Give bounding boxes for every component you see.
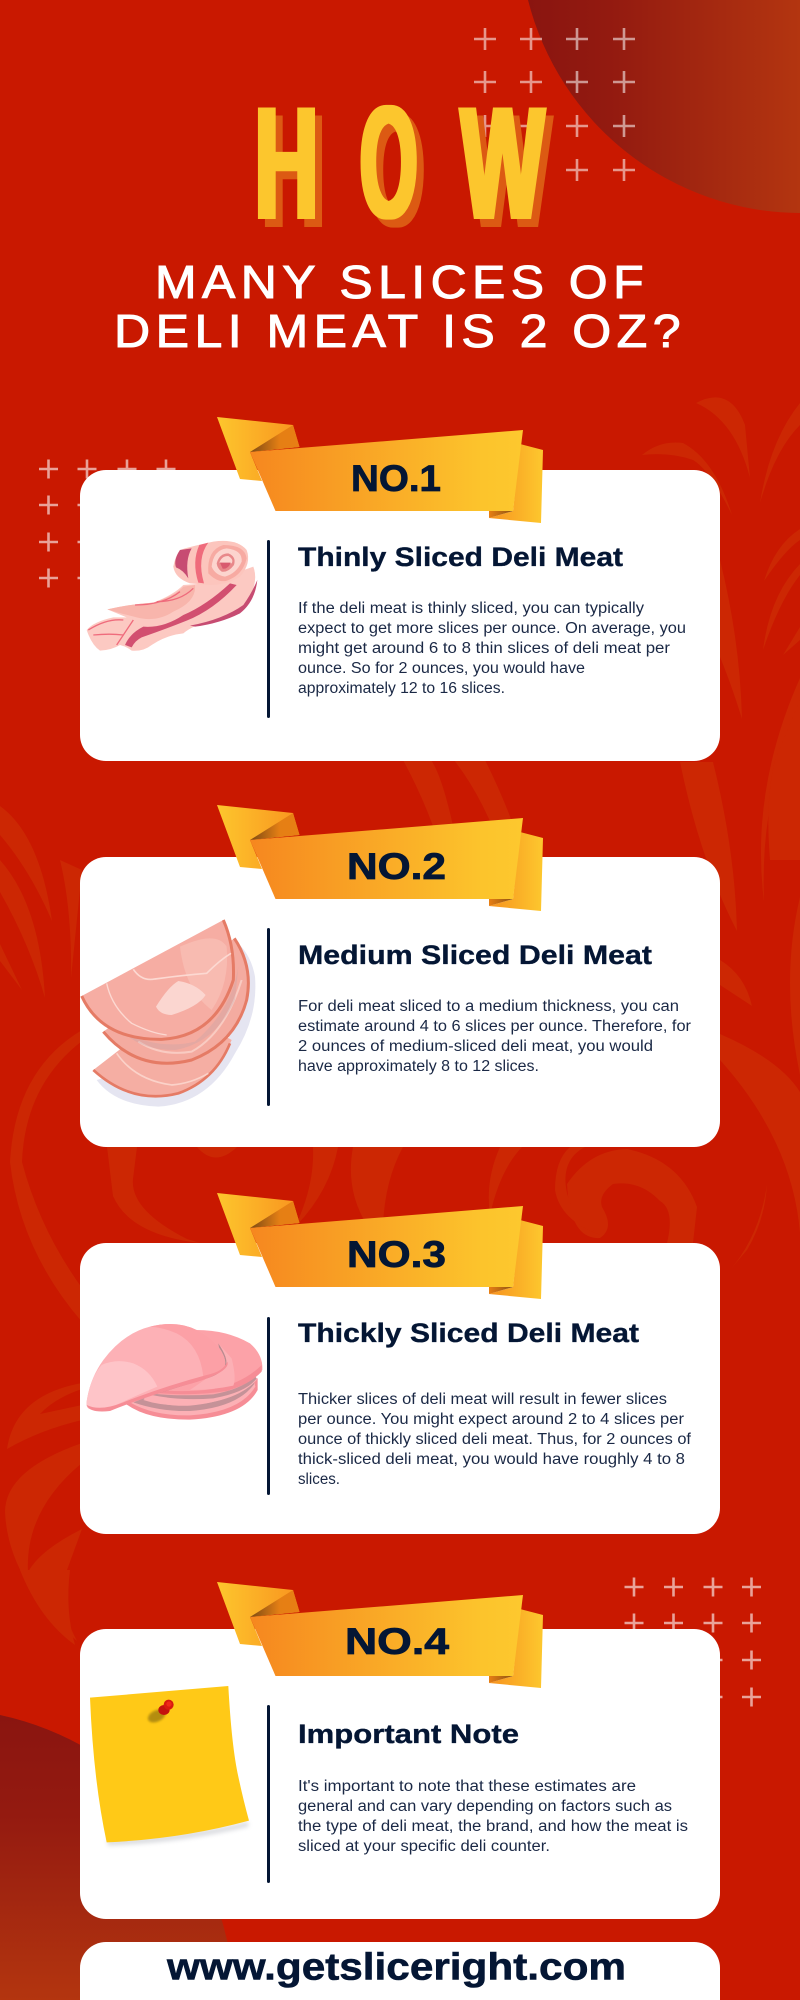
ribbon NO.1 bbox=[217, 417, 543, 523]
footer card bbox=[80, 1942, 720, 2000]
divider bbox=[267, 1317, 270, 1495]
body text: slices. bbox=[298, 1471, 340, 1488]
heading: Important Note bbox=[298, 1719, 519, 1749]
body text: thick-sliced deli meat, you would have roughly 4 to 8 bbox=[298, 1451, 685, 1468]
ribbon NO.2: NO.2 bbox=[347, 846, 446, 887]
body text: 2 ounces of medium-sliced deli meat, you would bbox=[298, 1038, 653, 1055]
divider bbox=[267, 1705, 270, 1883]
divider bbox=[267, 540, 270, 718]
title: HOW: H bbox=[254, 73, 318, 254]
body text bbox=[298, 1391, 692, 1488]
card 3 bbox=[80, 1243, 720, 1534]
background swirl pattern bbox=[0, 397, 800, 1645]
ribbon NO.4: NO.4 bbox=[345, 1621, 450, 1662]
website url: www.getsliceright.com bbox=[166, 1946, 626, 1988]
plus grid bottom right bbox=[624, 1578, 761, 1706]
ribbon NO.1: NO.1 bbox=[351, 458, 441, 499]
body text: If the deli meat is thinly sliced, you can typically bbox=[298, 600, 644, 617]
ribbon NO.2 bbox=[217, 805, 543, 911]
footer panel: website bbox=[80, 1942, 720, 2000]
body text bbox=[298, 1778, 688, 1855]
body text: ounce of thickly sliced deli meat. Thus, for 2 ounces of bbox=[298, 1431, 692, 1448]
dark corner circle bottom left bbox=[0, 1715, 234, 2000]
icon: thick slices bbox=[87, 1324, 262, 1420]
panel: important note bbox=[80, 1582, 720, 1919]
plus grid left bbox=[39, 460, 176, 588]
title: HOW: O bbox=[360, 72, 417, 253]
icon: bacon bbox=[87, 541, 257, 651]
icon: sticky note with pin bbox=[90, 1686, 249, 1846]
ribbon NO.3 bbox=[217, 1193, 543, 1299]
card 2 bbox=[80, 857, 720, 1147]
plus grid top right bbox=[474, 28, 635, 181]
body text bbox=[298, 998, 691, 1075]
title: HOW: W bbox=[460, 73, 545, 254]
heading: Thickly Sliced Deli Meat bbox=[298, 1318, 639, 1348]
body text: estimate around 4 to 6 slices per ounce. Therefore, for bbox=[298, 1018, 691, 1035]
body text: the type of deli meat, the brand, and how the meat is bbox=[298, 1818, 688, 1835]
title: HOW bbox=[254, 72, 552, 262]
title: HOW: O bbox=[367, 80, 424, 261]
body text: For deli meat sliced to a medium thickness, you can bbox=[298, 998, 679, 1015]
body text: might get around 6 to 8 thin slices of deli meat per bbox=[298, 640, 670, 657]
title: HOW: W bbox=[468, 81, 552, 262]
ribbon NO.4 bbox=[217, 1582, 543, 1688]
subtitle: MANY SLICES OF bbox=[155, 256, 649, 308]
dark corner circle top right bbox=[528, 0, 800, 213]
body text: It's important to note that these estimates are bbox=[298, 1778, 636, 1795]
body text: expect to get more slices per ounce. On average, you bbox=[298, 620, 686, 637]
body text bbox=[298, 600, 686, 697]
body text: sliced at your specific deli counter. bbox=[298, 1838, 550, 1855]
card 1 bbox=[80, 470, 720, 761]
panel: thickly sliced bbox=[80, 1193, 720, 1534]
subtitle bbox=[114, 256, 686, 357]
subtitle: DELI MEAT IS 2 OZ? bbox=[114, 305, 686, 357]
card 4 bbox=[80, 1629, 720, 1919]
ribbon NO.3: NO.3 bbox=[347, 1234, 446, 1275]
body text: per ounce. You might expect around 2 to 4 slices per bbox=[298, 1411, 684, 1428]
heading: Medium Sliced Deli Meat bbox=[298, 940, 652, 970]
body text: general and can vary depending on factors such as bbox=[298, 1798, 672, 1815]
heading: Thinly Sliced Deli Meat bbox=[298, 542, 623, 572]
panel: thinly sliced bbox=[80, 417, 720, 761]
body text: ounce. So for 2 ounces, you would have bbox=[298, 660, 585, 677]
body text: approximately 12 to 16 slices. bbox=[298, 680, 505, 697]
body text: have approximately 8 to 12 slices. bbox=[298, 1058, 539, 1075]
divider bbox=[267, 928, 270, 1106]
title: HOW: H bbox=[262, 81, 326, 262]
icon: ham slices bbox=[82, 920, 255, 1107]
panel: medium sliced bbox=[80, 805, 720, 1147]
body text: Thicker slices of deli meat will result in fewer slices bbox=[298, 1391, 667, 1408]
